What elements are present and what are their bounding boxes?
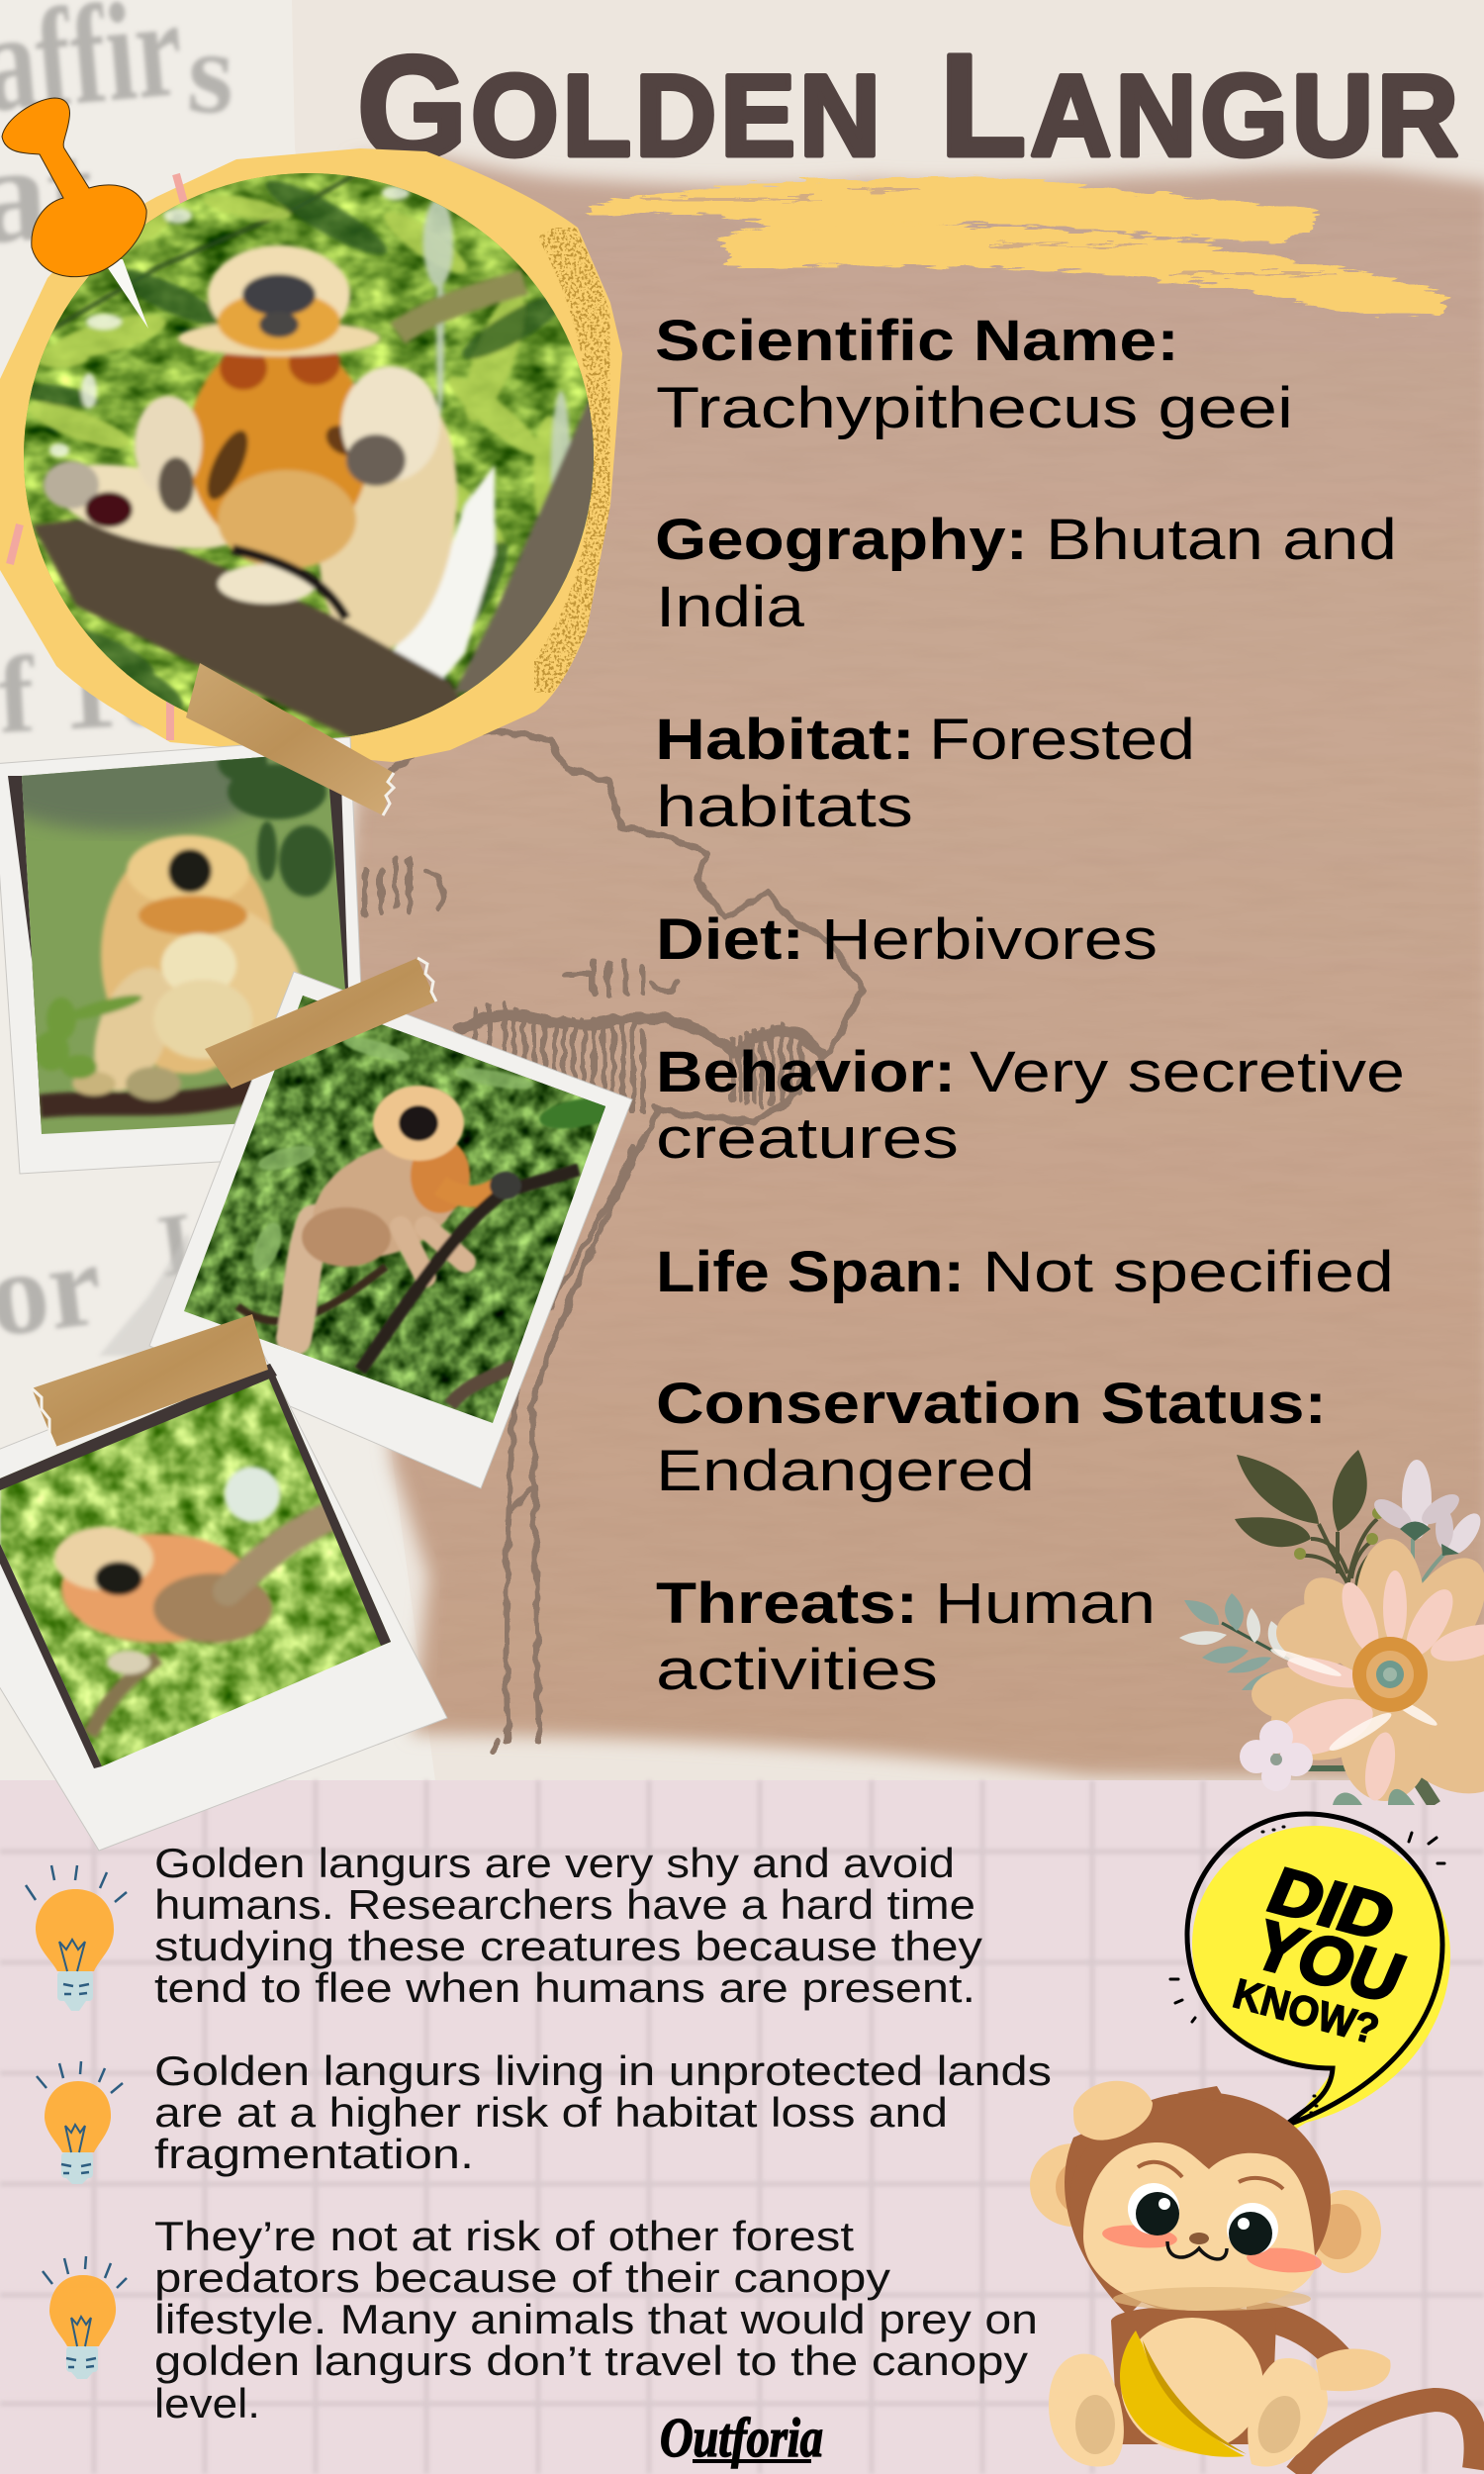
brush stroke — [589, 177, 1447, 317]
panel: newspaper clipping: f 10 — [0, 626, 173, 756]
life span: Not specified — [982, 1240, 1394, 1304]
photo card: mother and baby langur — [0, 732, 368, 1174]
threats: activities — [656, 1638, 938, 1702]
photo card: langur on branch in bamboo — [149, 972, 632, 1488]
fact three: level. — [154, 2380, 260, 2426]
behavior: Very secretive — [970, 1040, 1405, 1104]
title: G — [357, 27, 471, 189]
fact two: Golden langurs living in unprotected lands — [154, 2047, 1052, 2094]
speech bubble: did you know — [1170, 1814, 1450, 2138]
tape: card two — [205, 958, 436, 1089]
behavior: creatures — [656, 1106, 959, 1171]
fact one: Golden langurs are very shy and avoid — [154, 1840, 955, 1886]
fact three: golden langurs don’t travel to the canopy — [154, 2337, 1028, 2384]
diet: Diet: — [656, 907, 804, 972]
speech bubble: did you know: DID — [1257, 1855, 1406, 1954]
life span — [656, 1240, 1394, 1304]
conservation status: Conservation Status: — [656, 1372, 1327, 1436]
scientific name — [655, 309, 1293, 440]
panel: newspaper clipping: s — [185, 5, 237, 139]
threats: Threats: — [656, 1571, 918, 1636]
fact three: predators because of their canopy — [154, 2254, 890, 2301]
conservation status: Endangered — [656, 1439, 1035, 1503]
life span: Life Span: — [656, 1240, 965, 1304]
behavior: Behavior: — [656, 1040, 956, 1104]
tree line drawing — [365, 732, 863, 1752]
panel: newspaper clipping — [0, 0, 435, 1781]
fact three — [154, 2213, 1038, 2426]
bulb icon three — [43, 2256, 127, 2379]
panel: newspaper clipping: I — [152, 1194, 200, 1296]
photo card: langur among leaves — [0, 1346, 447, 1851]
panel: brown paper — [336, 155, 1484, 1781]
habitat — [655, 708, 1195, 839]
fact three: They’re not at risk of other forest — [154, 2213, 854, 2259]
geography — [655, 508, 1397, 639]
scientific name: Trachypithecus geei — [656, 376, 1293, 440]
icon: orange push pin — [2, 98, 148, 329]
floral decoration — [1179, 1450, 1484, 1817]
conservation status — [656, 1372, 1327, 1503]
title: LANGUR — [940, 25, 1462, 187]
fact three: lifestyle. Many animals that would prey on — [154, 2296, 1038, 2342]
habitat: Forested — [929, 708, 1195, 772]
fact one: humans. Researchers have a hard time — [154, 1881, 975, 1928]
geography: India — [656, 575, 805, 639]
diet: Herbivores — [821, 907, 1158, 972]
title: OLDEN — [471, 50, 884, 180]
behavior — [656, 1040, 1405, 1171]
bulb icon one — [26, 1865, 127, 2011]
habitat: habitats — [656, 775, 913, 839]
fact one: studying these creatures because they — [154, 1923, 982, 1969]
geography: Geography: — [655, 508, 1028, 572]
tape: card three — [32, 1314, 268, 1447]
fact two: are at a higher risk of habitat loss and — [154, 2089, 948, 2136]
bulb icon two — [37, 2061, 123, 2184]
cartoon monkey — [1030, 2081, 1476, 2474]
tape: main photo — [186, 663, 394, 815]
fact two: fragmentation. — [154, 2131, 474, 2177]
photo: golden langur on branch — [19, 168, 603, 747]
speech bubble: did you know: KNOW? — [1229, 1969, 1384, 2053]
threats — [656, 1571, 1156, 1702]
outforia logo: Outforia — [660, 2408, 823, 2469]
background: beige paper — [0, 0, 1484, 1781]
fact one: tend to flee when humans are present. — [154, 1964, 975, 2011]
habitat: Habitat: — [655, 708, 915, 772]
speech bubble: did you know: YOU — [1242, 1906, 1416, 2017]
diet — [656, 907, 1158, 972]
fact one — [154, 1840, 982, 2011]
threats: Human — [935, 1571, 1156, 1636]
scientific name: Scientific Name: — [655, 309, 1179, 373]
geography: Bhutan and — [1046, 508, 1397, 572]
main photo frame — [0, 148, 622, 762]
panel: pink grid paper — [0, 1780, 1484, 2474]
fact two — [154, 2047, 1052, 2177]
title — [357, 25, 1462, 189]
